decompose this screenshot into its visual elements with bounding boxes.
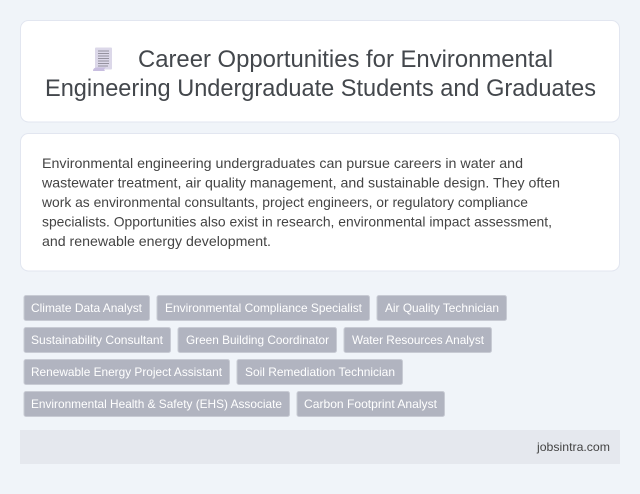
title: Engineering Undergraduate Students and Graduates — [45, 75, 596, 102]
panel: description — [20, 134, 620, 271]
icon: scroll document — [93, 48, 112, 71]
panel: title card — [20, 20, 620, 122]
tag: Environmental Compliance Specialist: Environmental Compliance Specialist — [165, 301, 363, 315]
tag: Sustainability Consultant — [24, 328, 170, 352]
tag: Air Quality Technician — [377, 296, 506, 320]
tag: Climate Data Analyst: Climate Data Analyst — [31, 301, 143, 315]
tag: Water Resources Analyst: Water Resources Analyst — [352, 333, 485, 347]
tag: Sustainability Consultant: Sustainability Consultant — [31, 333, 164, 347]
title: Career Opportunities for Environmental — [138, 46, 553, 73]
text block: description: Environmental engineering undergraduates can pursue careers in water and — [42, 155, 523, 171]
title — [45, 46, 596, 102]
text block: description — [41, 155, 560, 249]
footer text: jobsintra.com — [536, 440, 610, 454]
text block: description: wastewater treatment, air quality management, and sustainable design. They often — [41, 174, 560, 190]
tag: Carbon Footprint Analyst: Carbon Footprint Analyst — [304, 397, 438, 411]
footer bar — [20, 430, 620, 464]
tag: Carbon Footprint Analyst — [297, 392, 444, 416]
tag: Green Building Coordinator — [178, 328, 336, 352]
text block: description: work as environmental consultants, project engineers, or regulatory compliance — [41, 194, 528, 210]
tag: Renewable Energy Project Assistant — [24, 360, 230, 384]
tag: Air Quality Technician: Air Quality Technician — [385, 301, 499, 315]
text block: description: and renewable energy development. — [42, 233, 271, 249]
tag: Climate Data Analyst — [24, 296, 150, 320]
tag: Green Building Coordinator: Green Building Coordinator — [186, 333, 329, 347]
tag: Environmental Compliance Specialist — [157, 296, 370, 320]
tag list: related careers — [24, 296, 506, 416]
tag: Environmental Health & Safety (EHS) Associate: Environmental Health & Safety (EHS) Associate — [31, 397, 282, 411]
tag: Renewable Energy Project Assistant: Renewable Energy Project Assistant — [31, 365, 223, 379]
tag: Water Resources Analyst — [344, 328, 492, 352]
tag: Soil Remediation Technician — [237, 360, 402, 384]
tag: Environmental Health & Safety (EHS) Associate — [24, 392, 290, 416]
tag: Soil Remediation Technician: Soil Remediation Technician — [245, 365, 395, 379]
text block: description: specialists. Opportunities also exist in research, environmental impact assessment, — [42, 214, 552, 230]
